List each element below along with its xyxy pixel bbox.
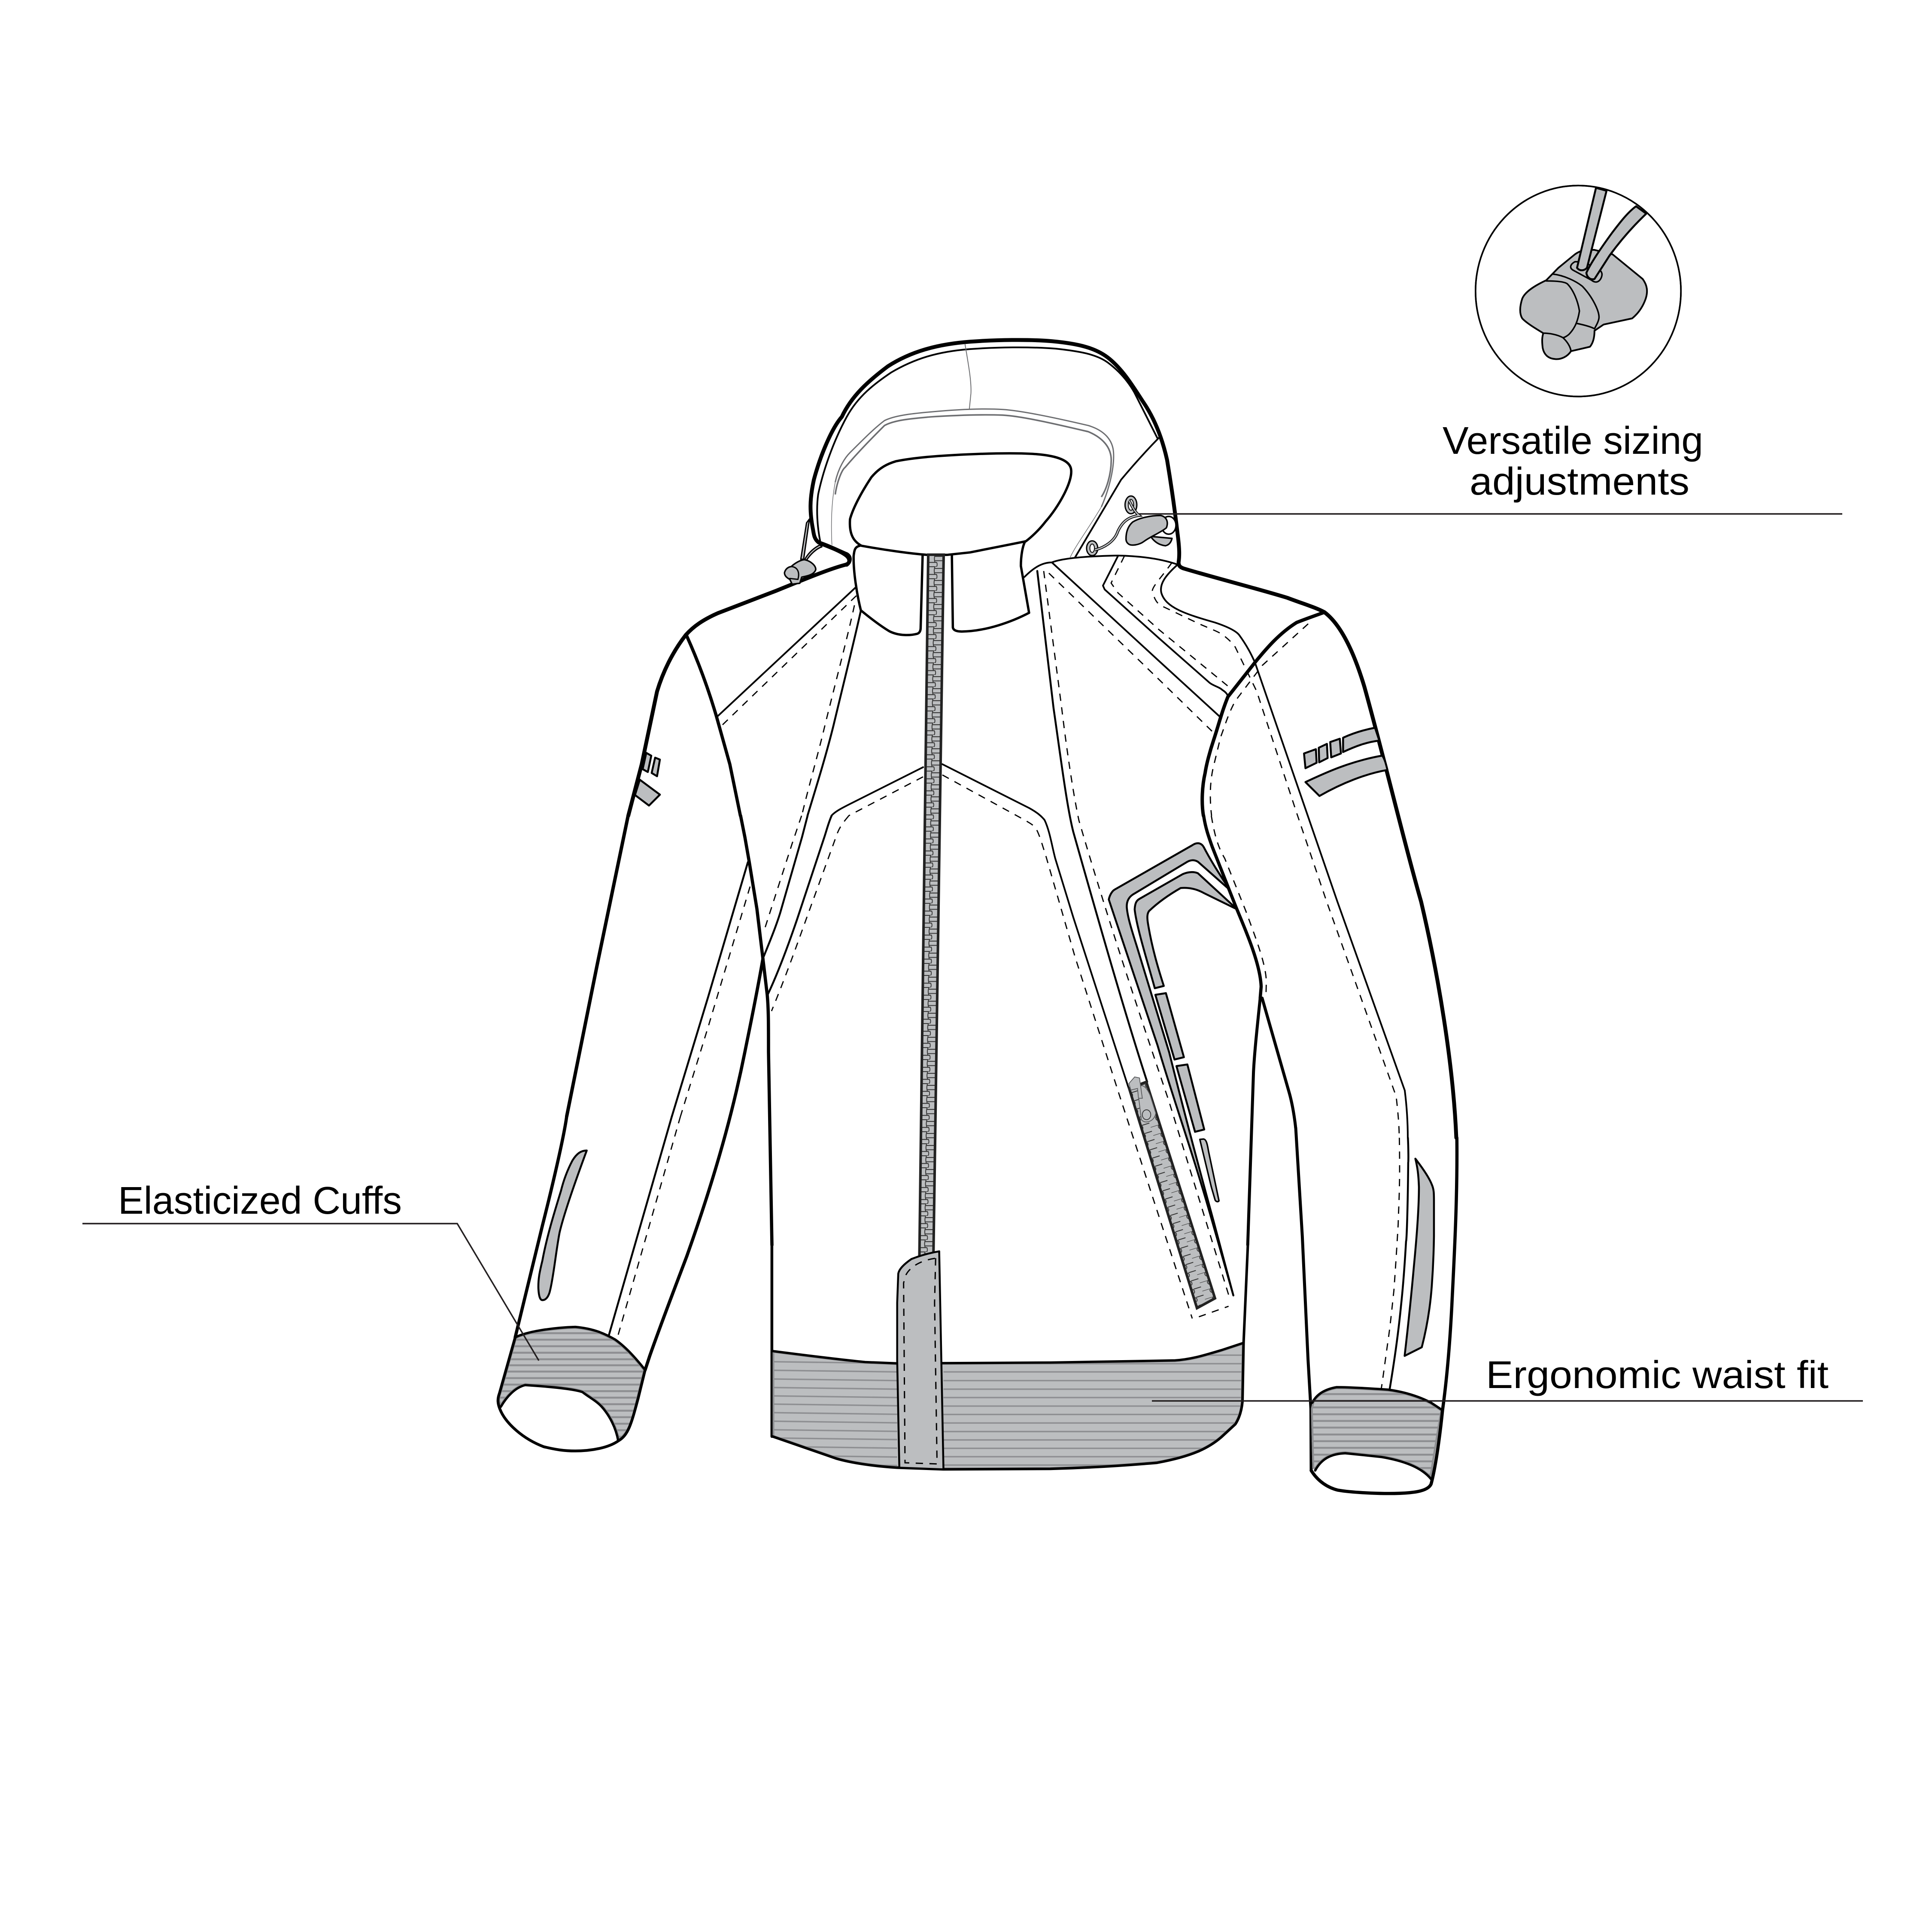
leader line: waist fit [1152,1400,1863,1402]
chest panels right [942,571,1229,1318]
label: versatile sizing adjustments: Versatile sizing [1443,419,1703,462]
chest reflective panel and pocket [1109,816,1296,1317]
left sleeve and side seams [567,816,772,1256]
jacket illustration [494,340,1457,1494]
left cuff [494,1116,687,1451]
right cuff [1296,1128,1457,1494]
cord lock left [784,519,822,584]
waist rib panel [772,1245,1248,1469]
centre zipper [919,555,944,1271]
right sleeve [1202,598,1456,1138]
reflective marks left sleeve [635,753,660,805]
callout: elasticized cuffs [82,1179,539,1361]
leader line: sizing adjustments [1139,513,1842,515]
shoulder panel right [1024,556,1408,1138]
sleeve reflective stripes [1304,728,1388,796]
leader line: elasticized cuffs [82,1224,539,1361]
zip flap [897,1252,944,1469]
label: ergonomic waist fit: Ergonomic waist fit [1486,1354,1829,1397]
magnified cord lock inset [1476,185,1681,397]
zipper slider [1129,1077,1156,1122]
pocket zipper [1129,1077,1215,1308]
hood cord adjuster [1087,496,1176,556]
left body panels [763,816,849,1011]
label: elasticized cuffs: Elasticized Cuffs [118,1179,402,1222]
callout: versatile sizing adjustments [1139,185,1842,514]
label: versatile sizing adjustments: adjustments [1470,460,1689,503]
collar [854,541,1029,635]
shoulder and yoke left [628,544,923,816]
hood [811,340,1288,598]
label: versatile sizing adjustments [1443,419,1703,503]
